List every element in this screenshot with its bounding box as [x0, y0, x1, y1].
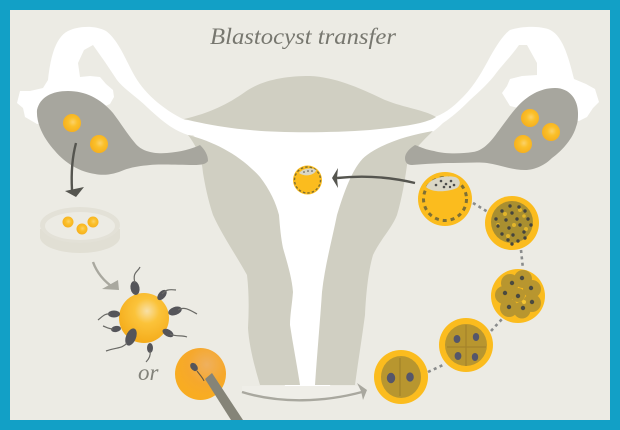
egg [542, 123, 560, 141]
yellow gaps [496, 208, 528, 238]
blastocyst in uterus [293, 166, 322, 194]
needle [205, 373, 243, 420]
nucleus [406, 372, 414, 382]
dish egg [76, 224, 88, 234]
arrow: egg to cell stage [242, 383, 367, 400]
blastocyst embryo [418, 172, 472, 226]
cells [495, 270, 541, 318]
small nuclei [303, 170, 313, 173]
injected sperm [189, 361, 199, 373]
dish egg [88, 216, 98, 228]
uterine wall left [188, 135, 300, 385]
white fallopian tubes and fimbriae [17, 27, 599, 138]
dotted connectors [428, 203, 523, 372]
small inner cell mass [299, 168, 316, 175]
fertilised egg with sperm [98, 267, 197, 362]
cervix strip [242, 386, 362, 401]
nuclei [494, 204, 533, 246]
yellow cell gap [522, 300, 526, 304]
egg [514, 135, 532, 153]
inner cell mass [426, 176, 460, 191]
or label: or [138, 360, 160, 385]
white uterine cavity [188, 130, 433, 386]
injected egg [175, 348, 243, 420]
inner cell nuclei [435, 180, 455, 188]
egg [63, 114, 81, 132]
nuclei [503, 276, 534, 310]
morula embryo [491, 269, 545, 323]
arrow: ovary to dish [65, 143, 84, 197]
dish egg [62, 216, 74, 228]
egg [521, 109, 539, 127]
arrow: dish to fertilisation [93, 262, 119, 290]
sperm group [108, 280, 183, 353]
uterine wall right [315, 131, 433, 385]
uterus fundus [184, 76, 436, 132]
four-cell embryo [439, 318, 493, 372]
petri dish [40, 207, 120, 253]
left ovary [37, 91, 208, 175]
egg [90, 135, 108, 153]
nucleus [387, 373, 395, 383]
two-cell embryo [374, 350, 428, 404]
title: Blastocyst transfer [210, 24, 397, 49]
dense cell embryo [485, 196, 539, 250]
arrow: transfer to uterus [332, 168, 415, 188]
sperm tails [98, 267, 197, 362]
nuclei [454, 333, 479, 361]
right ovary [405, 88, 578, 170]
sperm tail [197, 371, 204, 381]
